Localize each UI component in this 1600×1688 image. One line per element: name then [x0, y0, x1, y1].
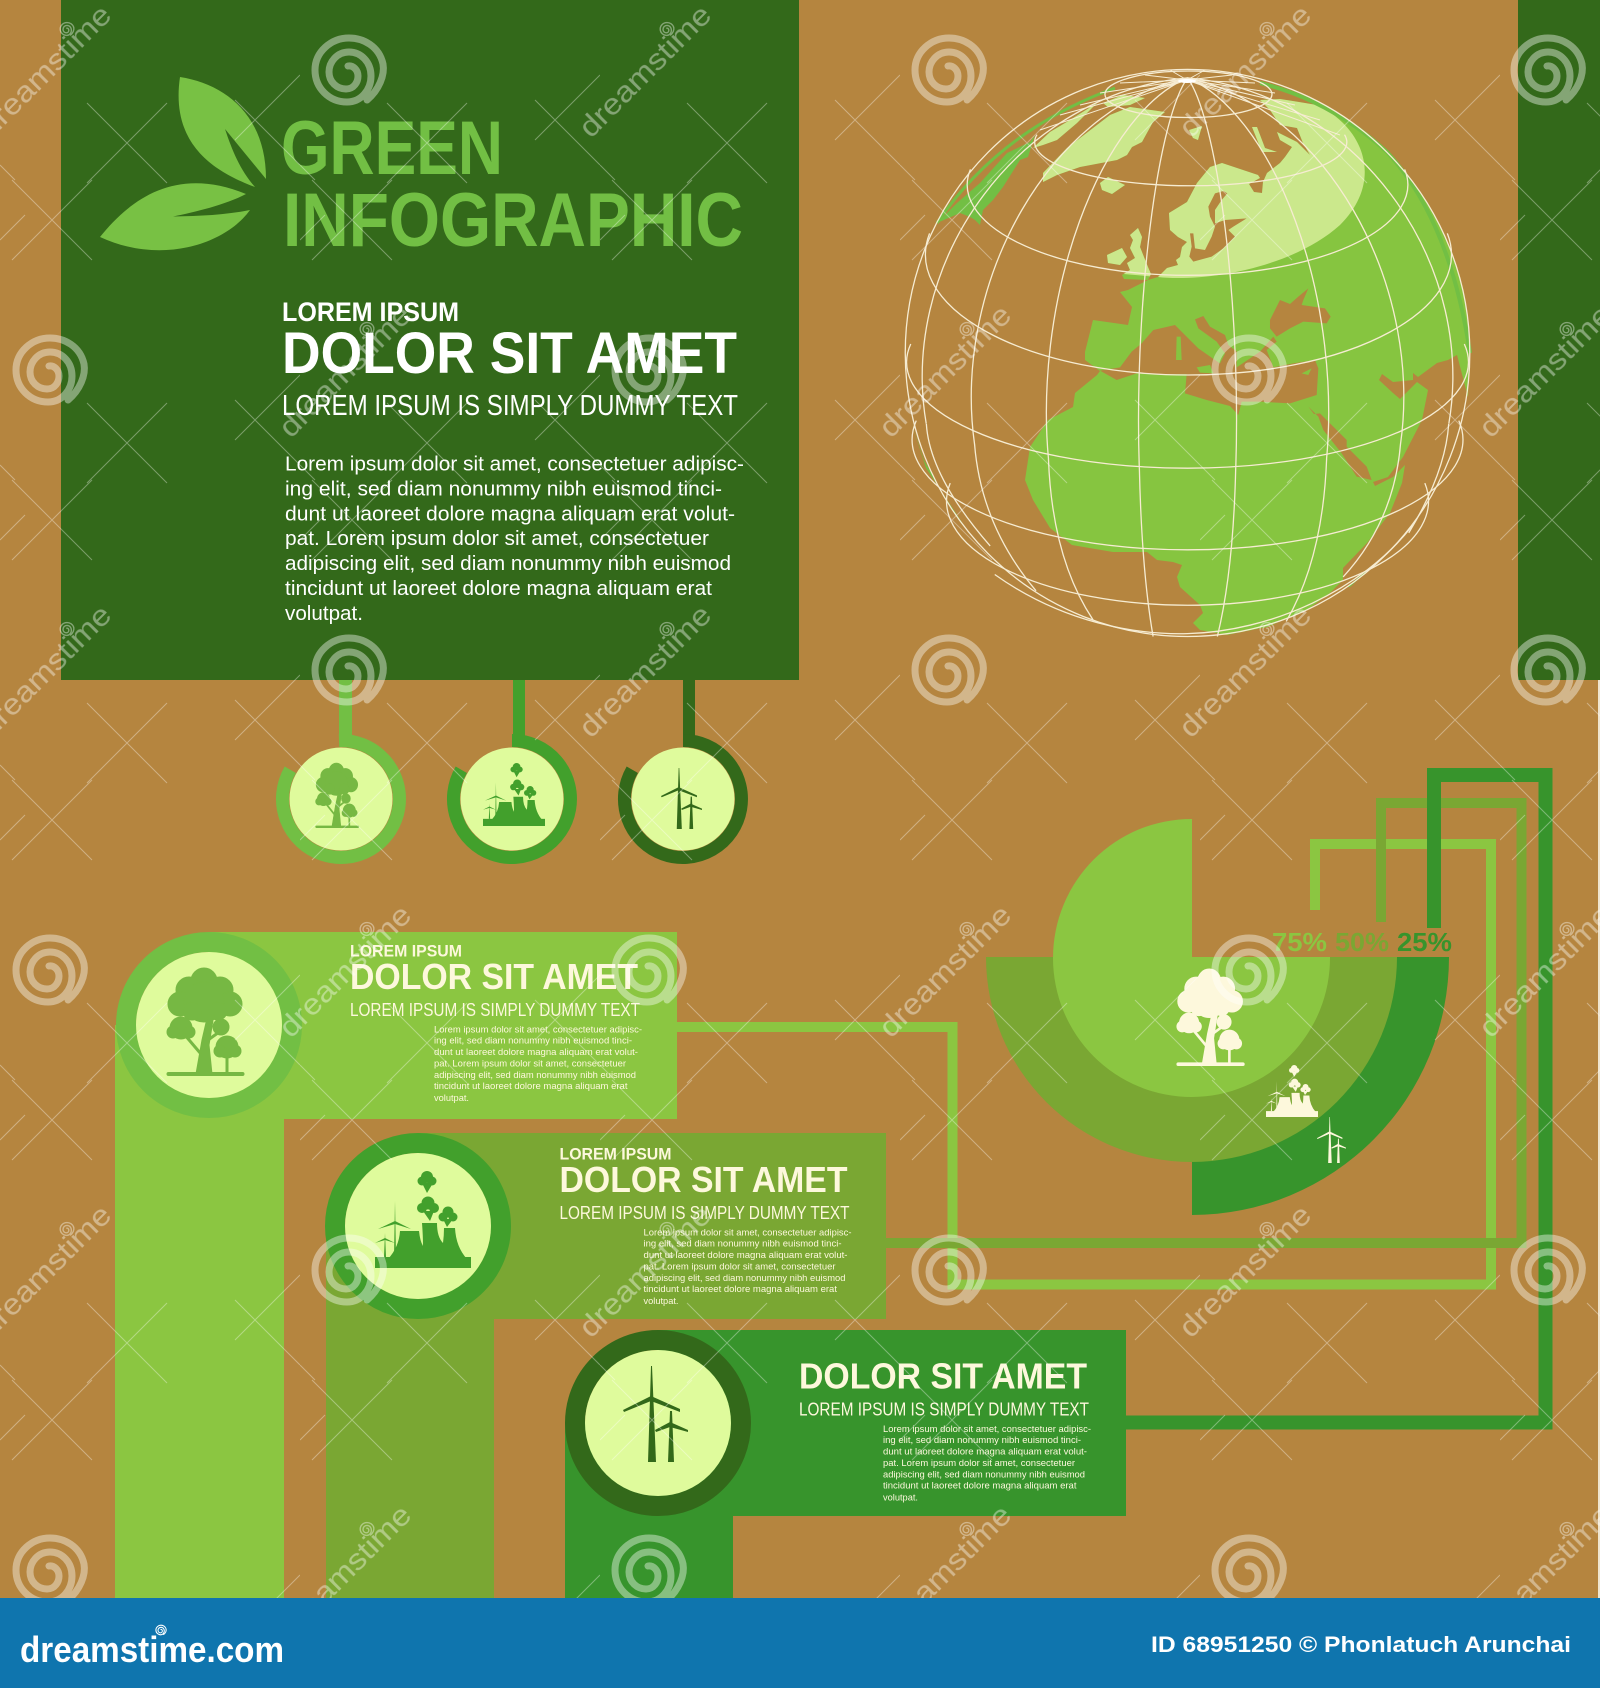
connector: band 2 to 50% [886, 803, 1522, 1243]
icon: pie factory [1266, 1065, 1318, 1117]
label: 50%: 50% [1335, 927, 1389, 957]
watermark: dreamstime text: dreamstime [572, 1198, 718, 1344]
text block: header paragraph: adipiscing elit, sed diam nonummy nibh euismod [285, 552, 731, 575]
text block: band 3: DOLOR SIT AMET [799, 1356, 1087, 1396]
text block: band 2 [560, 1144, 852, 1307]
chart: globe [905, 69, 1470, 636]
text block: band 1: tincidunt ut laoreet dolore magna aliquam erat [434, 1081, 628, 1092]
globe islands [1176, 337, 1312, 375]
watermark: dreamstime text: dreamstime [1172, 1198, 1318, 1344]
text block: band 1 [350, 942, 642, 1104]
title: INFOGRAPHIC [283, 178, 743, 263]
watermark: dreamstime text: dreamstime [872, 1498, 1018, 1644]
connector: band 1 to 75% [677, 844, 1491, 1284]
chart: concentric pie [986, 819, 1449, 1215]
text block: header paragraph: ing elit, sed diam nonummy nibh euismod tinci- [285, 478, 722, 500]
slice: 75% [1053, 819, 1330, 1097]
watermark: dreamstime text: dreamstime [272, 298, 418, 444]
watermark: dreamstime text: dreamstime [272, 898, 418, 1044]
text block: header paragraph: tincidunt ut laoreet dolore magna aliquam erat [285, 577, 712, 600]
heading: header panel: LOREM IPSUM [282, 297, 459, 327]
slice: 50% [986, 957, 1397, 1162]
icon: turbine badge [624, 680, 741, 858]
right page edge [1598, 680, 1600, 1598]
panel: band 3 [565, 1330, 1126, 1598]
text block: band 3: LOREM IPSUM IS SIMPLY DUMMY TEXT [799, 1398, 1089, 1420]
text block: band 2: LOREM IPSUM IS SIMPLY DUMMY TEXT [560, 1202, 850, 1223]
text block: band 3: Lorem ipsum dolor sit amet, consectetuer adipisc- [883, 1424, 1091, 1435]
text block: band 1: LOREM IPSUM [350, 942, 462, 960]
heading: header panel: DOLOR SIT AMET [282, 321, 737, 386]
heading: header panel [282, 297, 738, 422]
globe seas: baltic [1189, 191, 1247, 262]
text block: band 2: tincidunt ut laoreet dolore magna aliquam erat [644, 1284, 837, 1295]
icon: pie turbine [1317, 1117, 1346, 1163]
heading: header panel: LOREM IPSUM IS SIMPLY DUMMY TEXT [282, 390, 738, 422]
text block: band 1: volutpat. [434, 1093, 469, 1104]
watermark: dreamstime text: dreamstime [572, 598, 718, 744]
footer logo: dreamstime.com [20, 1629, 284, 1670]
text block: band 3 [799, 1356, 1091, 1504]
watermark: dreamstime text: dreamstime [272, 1498, 418, 1644]
icon: factory badge [453, 680, 570, 858]
globe graticule [905, 69, 1470, 636]
panel: right dark green strip [1518, 0, 1600, 680]
globe highlight [1034, 95, 1365, 278]
text block: header paragraph: volutpat. [285, 602, 363, 625]
text block: band 2: LOREM IPSUM [560, 1144, 672, 1164]
text block: band 1: pat. Lorem ipsum dolor sit amet, consectetuer [434, 1058, 626, 1069]
label: 75%: 75% [1272, 927, 1327, 957]
text block: band 3: ing elit, sed diam nonummy nibh euismod tinci- [883, 1435, 1081, 1446]
watermark: dreamstime text: dreamstime [872, 298, 1018, 444]
globe pole fan [1040, 70, 1340, 135]
footer bar [0, 1598, 1600, 1688]
text block: band 2: volutpat. [644, 1296, 678, 1307]
text block: band 3: dunt ut laoreet dolore magna aliquam erat volut- [883, 1446, 1087, 1458]
title [281, 106, 743, 263]
panel: band 1 [115, 932, 677, 1598]
globe land [912, 95, 1470, 635]
text block: band 3: volutpat. [883, 1492, 918, 1504]
watermark: dreamstime text: dreamstime [1172, 0, 1318, 144]
label: 25%: 25% [1397, 927, 1452, 957]
watermark: dreamstime text: dreamstime [872, 898, 1018, 1044]
text block: header paragraph: pat. Lorem ipsum dolor sit amet, consectetuer [285, 527, 709, 550]
panel: dark green header [61, 0, 799, 680]
icon: tree circle [126, 942, 292, 1108]
title: GREEN [281, 106, 503, 191]
text block: band 2: dunt ut laoreet dolore magna aliquam erat volut- [644, 1250, 848, 1261]
panel: band 2 [326, 1133, 886, 1598]
text block: band 1: adipiscing elit, sed diam nonummy nibh euismod [434, 1070, 636, 1081]
text block: header paragraph: Lorem ipsum dolor sit amet, consectetuer adipisc- [285, 452, 744, 476]
text block: header paragraph: dunt ut laoreet dolore magna aliquam erat volut- [285, 502, 735, 526]
text block: header paragraph [285, 452, 744, 625]
text block: band 2: adipiscing elit, sed diam nonummy nibh euismod [644, 1273, 846, 1284]
globe limb [937, 83, 1470, 353]
icon: pie tree [1177, 969, 1244, 1066]
watermark: dreamstime text: dreamstime [1172, 598, 1318, 744]
icon: turbine circle [575, 1340, 741, 1506]
text block: band 1: DOLOR SIT AMET [350, 956, 638, 997]
text block: band 3: pat. Lorem ipsum dolor sit amet, consectetuer [883, 1458, 1075, 1469]
footer credit: ID 68951250 © Phonlatuch Arunchai [1151, 1632, 1571, 1657]
icon: factory circle [335, 1143, 501, 1309]
icon: leaves logo [100, 77, 266, 250]
text block: band 3: adipiscing elit, sed diam nonummy nibh euismod [883, 1470, 1085, 1480]
text block: band 1: Lorem ipsum dolor sit amet, consectetuer adipisc- [434, 1024, 642, 1036]
text block: band 2: DOLOR SIT AMET [560, 1159, 848, 1200]
text block: band 3: tincidunt ut laoreet dolore magna aliquam erat [883, 1480, 1077, 1492]
watermark: dreamstime text: dreamstime [572, 0, 718, 144]
icon: tree badge [282, 680, 399, 857]
slice: 25% [1192, 957, 1449, 1215]
text block: band 2: ing elit, sed diam nonummy nibh euismod tinci- [644, 1239, 842, 1250]
text block: band 1: ing elit, sed diam nonummy nibh euismod tinci- [434, 1036, 632, 1047]
text block: band 1: dunt ut laoreet dolore magna aliquam erat volut- [434, 1047, 638, 1058]
text block: band 2: Lorem ipsum dolor sit amet, consectetuer adipisc- [644, 1228, 852, 1238]
text block: band 1: LOREM IPSUM IS SIMPLY DUMMY TEXT [350, 999, 640, 1020]
text block: band 2: pat. Lorem ipsum dolor sit amet, consectetuer [644, 1261, 836, 1272]
globe seas: mediterranean, black sea, red sea [1100, 288, 1372, 480]
connector: band 3 to 25% [1126, 775, 1546, 1422]
